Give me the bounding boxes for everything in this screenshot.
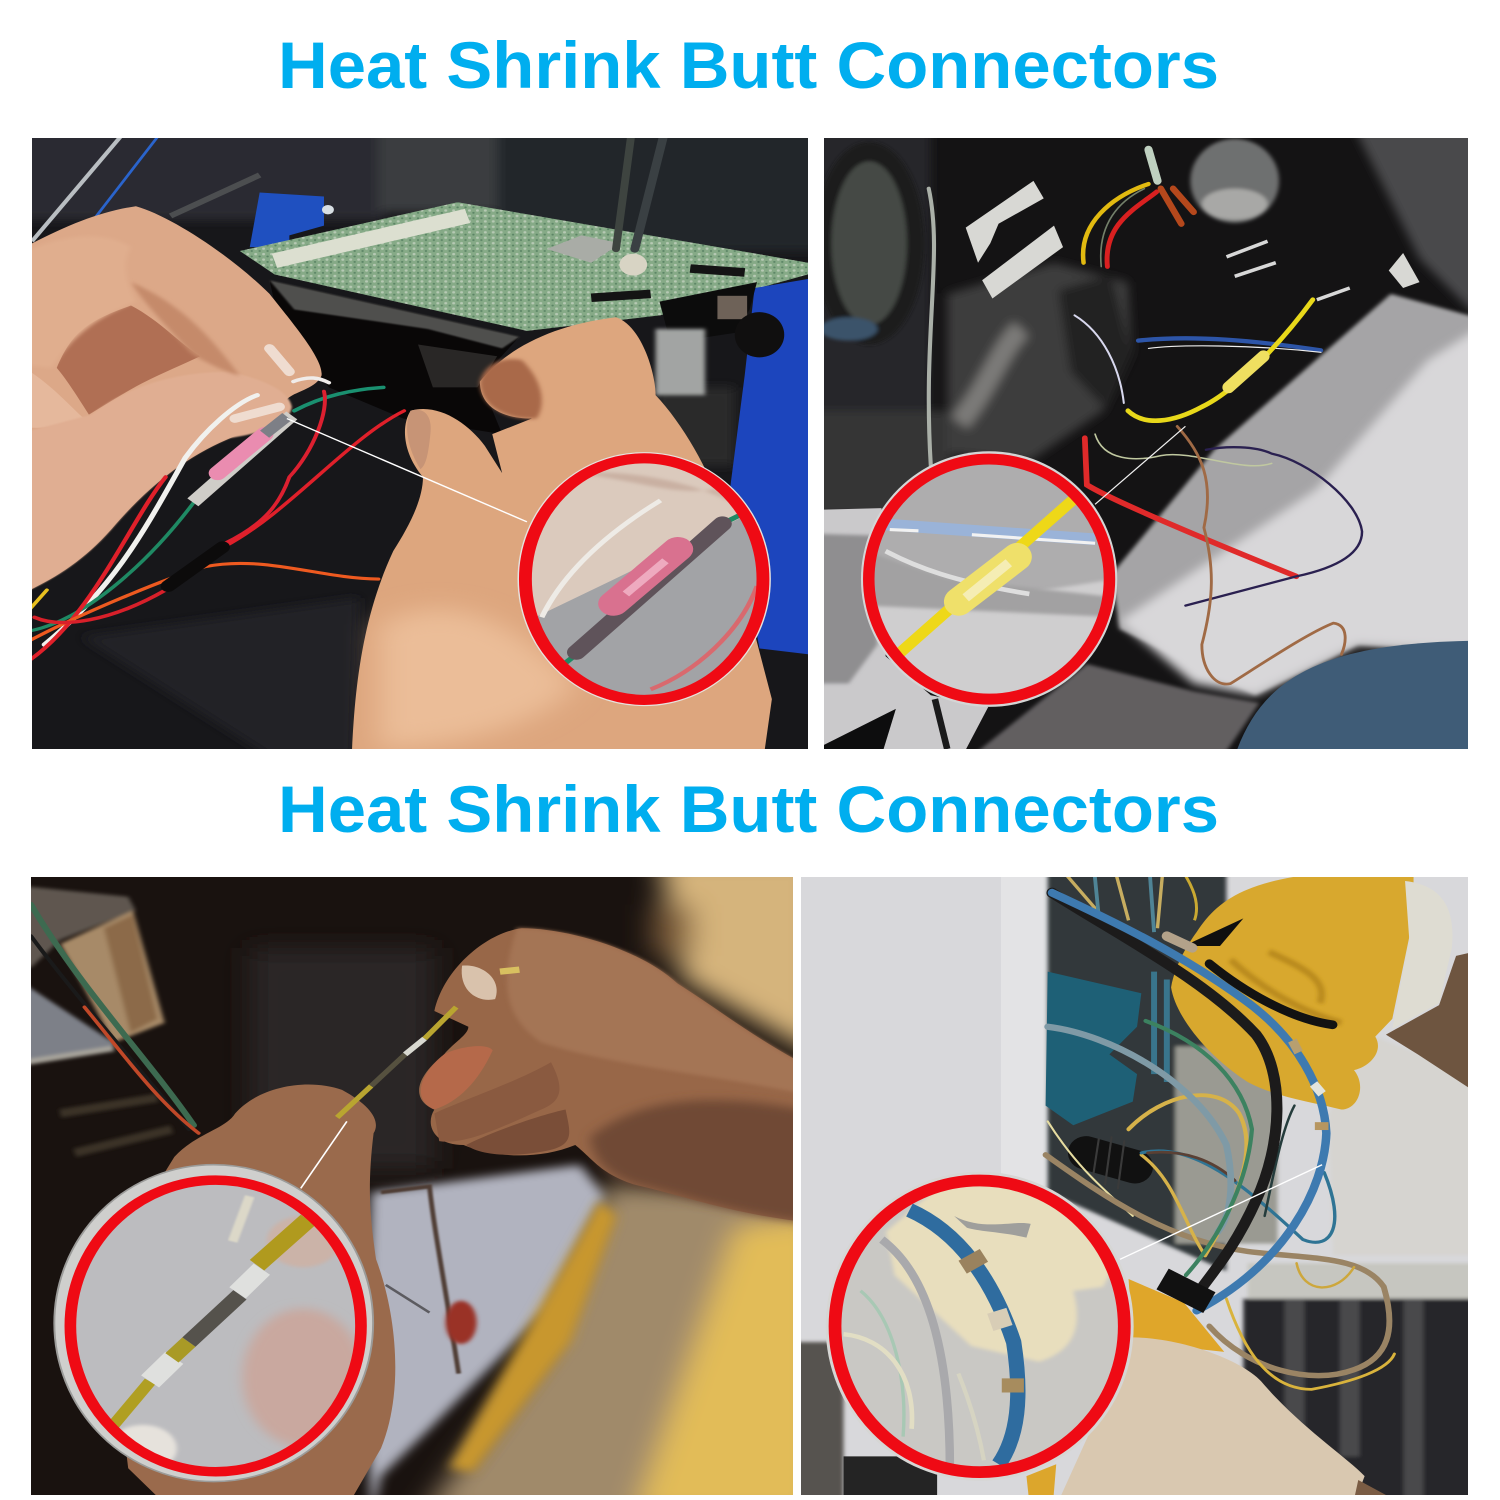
speaker <box>814 142 925 345</box>
panel: electrical cabinet wiring photo <box>801 877 1468 1495</box>
blue stand background block <box>250 193 334 247</box>
yellow gloved hand <box>1171 869 1490 1110</box>
title: top heading: Heat Shrink Butt Connectors <box>278 28 1219 102</box>
light plastic trim <box>803 294 1489 769</box>
bundled wires <box>31 905 199 1133</box>
panel: soldering circuit board photo <box>32 138 808 749</box>
right hand <box>351 317 772 769</box>
dangling wire with red tip <box>381 1186 477 1374</box>
white connector clips <box>966 181 1420 300</box>
left hand <box>17 206 322 596</box>
blue terminal block <box>1046 972 1141 1125</box>
circuit board <box>240 202 808 331</box>
lower gloved hand and sleeve <box>1026 1279 1409 1500</box>
upper hand <box>419 928 823 1224</box>
wires <box>929 150 1362 684</box>
blue clamp stand <box>656 279 808 654</box>
tangled wires <box>1046 893 1394 1389</box>
upper wire bundle <box>1065 873 1196 1082</box>
yellow connector in hand <box>337 970 519 1117</box>
panel: car dashboard wiring photo <box>824 138 1468 749</box>
corrugated tube <box>1086 1137 1135 1188</box>
pointer line <box>1120 1165 1322 1259</box>
pink heat shrink connector <box>193 415 292 502</box>
cloth behind wires <box>366 1165 604 1500</box>
probes <box>616 138 663 276</box>
dark conduit <box>844 1456 937 1500</box>
background wires <box>32 136 260 241</box>
pointer line <box>1095 426 1185 504</box>
blue work sleeve <box>1231 641 1489 769</box>
pointer line <box>287 419 527 522</box>
lower hand <box>104 1085 395 1500</box>
pointer line <box>301 1121 347 1188</box>
control unit case <box>270 280 519 434</box>
magnifier: pink connector <box>517 450 774 707</box>
magnifier: yellow connector <box>861 450 1124 707</box>
magnifier: blue connector <box>826 1172 1134 1481</box>
wires in hand <box>30 378 404 660</box>
control knob <box>1190 139 1279 223</box>
blurred yellow strip <box>449 1200 617 1472</box>
metal spool <box>12 885 172 1153</box>
panel: hands holding connector photo <box>31 877 793 1495</box>
title: second heading: Heat Shrink Butt Connectors <box>278 772 1219 846</box>
magnifier: yellow and grey connector <box>54 1165 373 1484</box>
